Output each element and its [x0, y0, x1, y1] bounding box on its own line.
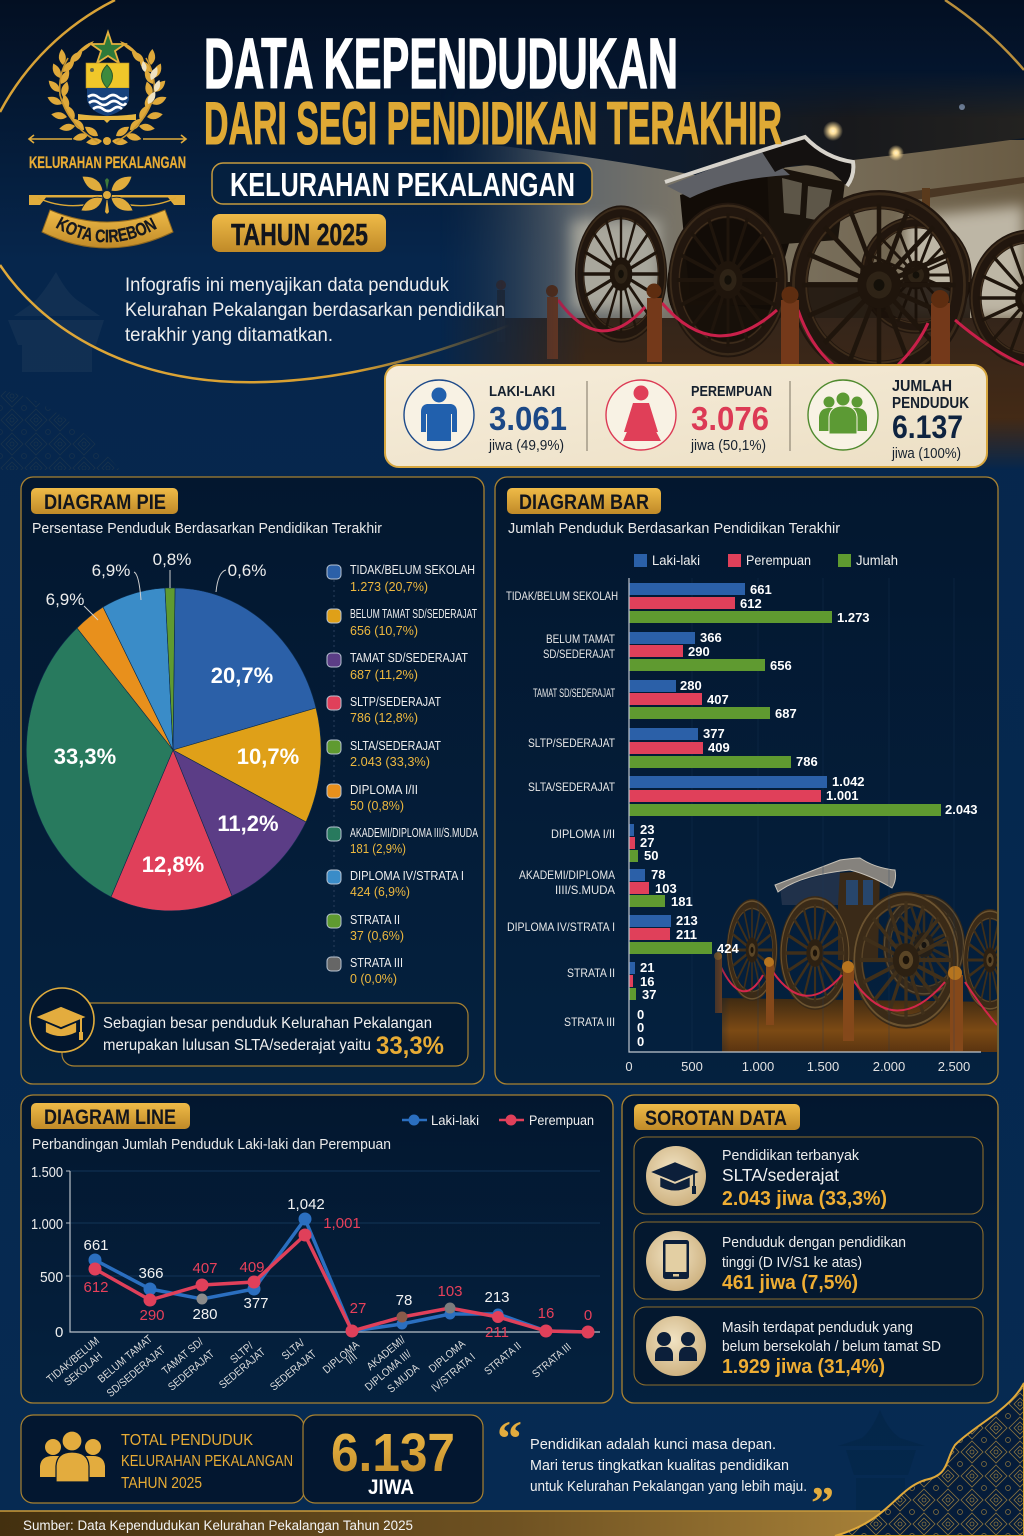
highlight: pendidikan tinggi: Penduduk dengan pendidikan — [722, 1235, 906, 1251]
bar categories: DIPLOMA IV/STRATA I — [507, 920, 615, 934]
bar axis: 2.500 — [938, 1059, 970, 1074]
bar values: 181 — [671, 894, 693, 909]
line: perempuan — [88, 1228, 594, 1338]
line axes: 1.000 — [31, 1216, 63, 1233]
bar categories — [506, 589, 618, 1029]
ribbon: kota cirebon: KOTA CIREBON — [56, 216, 157, 242]
panel: diagram line — [21, 1095, 613, 1403]
line: laki-laki — [88, 1212, 588, 1332]
stat: female — [606, 380, 772, 454]
pie legend: 2.043 (33,3%) — [350, 754, 430, 769]
total population label card: TOTAL PENDUDUK — [121, 1432, 253, 1449]
quote: untuk Kelurahan Pekalangan yang lebih maju. — [530, 1478, 807, 1495]
quote: Mari terus tingkatkan kualitas pendidikan — [530, 1457, 789, 1474]
stat: male: LAKI-LAKI — [489, 383, 555, 400]
line values: 407 — [192, 1260, 218, 1277]
quote — [497, 1410, 834, 1528]
highlight: belum tamat: Masih terdapat penduduk yang — [722, 1320, 913, 1336]
highlight: belum tamat: belum bersekolah / belum tamat SD — [722, 1339, 941, 1355]
total population number card — [303, 1415, 483, 1503]
pie legend: DIPLOMA I/II — [350, 782, 418, 797]
photo room — [440, 70, 1024, 470]
icon: people group — [40, 1431, 105, 1482]
line legend: Perempuan — [529, 1113, 594, 1128]
bar subtitle: Jumlah Penduduk Berdasarkan Pendidikan Terakhir — [508, 521, 840, 537]
bar axis: 500 — [681, 1059, 703, 1074]
line legend — [402, 1113, 594, 1128]
bar values: 377 — [703, 726, 725, 741]
heading: diagram line: DIAGRAM LINE — [44, 1106, 176, 1129]
pie values: 11,2% — [217, 811, 279, 836]
pie legend: SLTP/SEDERAJAT — [350, 694, 441, 709]
icon: tablet — [646, 1231, 706, 1291]
line legend: Laki-laki — [431, 1113, 479, 1128]
line values: 280 — [192, 1306, 218, 1323]
line axes: 0 — [55, 1324, 63, 1341]
bar values: 0 — [637, 1007, 644, 1022]
pie legend: 37 (0,6%) — [350, 928, 404, 943]
bar axis — [625, 578, 981, 1074]
quote: ” — [811, 1477, 834, 1528]
rope barrier — [496, 280, 1024, 368]
line values: 612 — [83, 1279, 109, 1296]
pie values: 6,9% — [92, 561, 130, 580]
bar categories: BELUM TAMAT — [546, 632, 616, 646]
pie legend: DIPLOMA IV/STRATA I — [350, 868, 464, 883]
bar values: 424 — [717, 941, 739, 956]
icon: star — [91, 32, 125, 63]
intro text: Kelurahan Pekalangan berdasarkan pendidikan — [125, 300, 505, 321]
pie legend: TIDAK/BELUM SEKOLAH — [350, 562, 475, 577]
icon: arrows — [29, 135, 186, 143]
bar legend: Perempuan — [746, 553, 811, 568]
intro text: Infografis ini menyajikan data penduduk — [125, 275, 449, 296]
callout: slta majority: merupakan lulusan SLTA/sederajat yaitu — [103, 1037, 371, 1054]
line categories — [45, 1333, 574, 1400]
highlight: pendidikan tinggi: tinggi (D IV/S1 ke atas) — [722, 1255, 862, 1271]
title — [204, 25, 782, 157]
highlight: belum tamat — [634, 1307, 983, 1385]
pie legend: 656 (10,7%) — [350, 623, 418, 638]
quote: Pendidikan adalah kunci masa depan. — [530, 1436, 776, 1453]
bar values: 0 — [637, 1020, 644, 1035]
bar values: 656 — [770, 658, 792, 673]
pie legend: 687 (11,2%) — [350, 667, 418, 682]
pie chart — [26, 588, 321, 911]
line categories: S.MUDA — [386, 1362, 422, 1396]
decorative temple silhouette — [838, 1410, 925, 1510]
line categories: SEDERAJAT — [166, 1348, 218, 1394]
line values: 103 — [437, 1283, 463, 1300]
line values: 27 — [350, 1300, 366, 1317]
bar axis: 0 — [625, 1059, 633, 1074]
line categories: DIPLOMA III/ — [363, 1348, 414, 1394]
line categories: SEDERAJAT — [268, 1348, 320, 1394]
icon: graduation cap — [30, 988, 94, 1052]
bar categories: STRATA II — [567, 966, 615, 980]
pie values — [46, 550, 299, 877]
bar categories: IIII/S.MUDA — [555, 883, 615, 897]
logo emblem — [28, 29, 188, 248]
stat: female: PEREMPUAN — [691, 383, 772, 400]
intro text — [125, 275, 505, 346]
line categories: DIPLOMA — [427, 1338, 468, 1375]
bar values: 290 — [688, 644, 710, 659]
bar values: 1.273 — [837, 610, 870, 625]
pie values: 12,8% — [142, 852, 204, 877]
bar values: 37 — [642, 987, 656, 1002]
bar categories: TIDAK/BELUM SEKOLAH — [506, 589, 618, 603]
bar values: 16 — [640, 974, 654, 989]
carriage — [577, 137, 1024, 376]
pie legend: 786 (12,8%) — [350, 710, 418, 725]
logo caption: KELURAHAN PEKALANGAN — [29, 153, 186, 172]
callout: slta majority — [30, 988, 468, 1066]
icon: shield — [78, 63, 136, 123]
panel: sorotan data — [622, 1095, 998, 1403]
pie legend: 181 (2,9%) — [350, 841, 406, 856]
line categories: IV/STRATA I — [430, 1351, 478, 1395]
bar values: 50 — [644, 848, 658, 863]
bar values: 409 — [708, 740, 730, 755]
title: DATA KEPENDUDUKAN — [204, 25, 678, 104]
panel: diagram pie — [21, 477, 484, 1084]
header arcs — [0, 0, 1024, 382]
total population number card: 6.137 — [331, 1423, 455, 1483]
line values: 16 — [538, 1305, 554, 1322]
line values: 366 — [138, 1265, 164, 1282]
heading: diagram pie: DIAGRAM PIE — [44, 491, 166, 514]
line values: 661 — [83, 1237, 109, 1254]
total population label card — [21, 1415, 304, 1503]
pie legend: BELUM TAMAT SD/SEDERAJAT — [350, 606, 477, 621]
bar values: 612 — [740, 596, 762, 611]
stat: male: 3.061 — [489, 400, 567, 437]
bar axis: 1.000 — [742, 1059, 774, 1074]
decorative corner batik — [835, 1383, 1024, 1536]
bar axis: 1.500 — [807, 1059, 839, 1074]
bar values: 21 — [640, 960, 654, 975]
bar values: 78 — [651, 867, 665, 882]
line categories: SD/SEDERAJAT — [105, 1344, 169, 1400]
highlight: pendidikan tinggi — [634, 1222, 983, 1299]
stat: total: jiwa (100%) — [891, 446, 961, 462]
bar categories: SLTP/SEDERAJAT — [528, 736, 616, 750]
pie values: 10,7% — [237, 744, 299, 769]
stat: total: JUMLAH — [892, 378, 952, 395]
decorative batik motif: left — [0, 272, 120, 470]
bar values: 23 — [640, 822, 654, 837]
stat: total — [808, 378, 969, 462]
icon: graduation cap — [646, 1146, 706, 1206]
footer bar: Sumber: Data Kependudukan Kelurahan Pekalangan Tahun 2025 — [23, 1518, 413, 1533]
bar values: 213 — [676, 913, 698, 928]
pie values: 0,6% — [228, 561, 266, 580]
pie values: 6,9% — [46, 590, 84, 609]
line categories: SEDERAJAT — [217, 1346, 269, 1392]
stat: male — [404, 380, 567, 454]
header photo: museum carriage — [440, 70, 1024, 470]
heading: diagram bar: DIAGRAM BAR — [519, 491, 649, 514]
icon: two people — [646, 1316, 706, 1376]
highlight: belum tamat: 1.929 jiwa (31,4%) — [722, 1356, 885, 1378]
line values: 1,001 — [323, 1215, 361, 1232]
stat: female: 3.076 — [691, 400, 769, 437]
total population number card: JIWA — [368, 1476, 414, 1499]
bar values: 366 — [700, 630, 722, 645]
bar values: 280 — [680, 678, 702, 693]
line values: 290 — [139, 1307, 165, 1324]
line categories: TIDAK/BELUM — [45, 1335, 102, 1386]
intro text: terakhir yang ditamatkan. — [125, 325, 333, 346]
pie legend: 50 (0,8%) — [350, 798, 404, 813]
bar legend: Laki-laki — [652, 553, 700, 568]
bar legend: Jumlah — [856, 553, 898, 568]
bar values: 786 — [796, 754, 818, 769]
pie values: 33,3% — [54, 744, 116, 769]
pie subtitle: Persentase Penduduk Berdasarkan Pendidikan Terakhir — [32, 521, 382, 537]
heading: sorotan data: SOROTAN DATA — [645, 1107, 787, 1130]
highlight: pendidikan tinggi: 461 jiwa (7,5%) — [722, 1272, 858, 1294]
line categories: SEKOLAH — [63, 1350, 105, 1389]
bar values: 1.001 — [826, 788, 859, 803]
bar values: 661 — [750, 582, 772, 597]
line values: 377 — [243, 1295, 269, 1312]
pill: kelurahan: KELURAHAN PEKALANGAN — [230, 166, 575, 203]
bar values: 407 — [707, 692, 729, 707]
line categories: STRATA II — [483, 1340, 524, 1378]
bar categories: AKADEMI/DIPLOMA — [519, 868, 615, 882]
line categories: STRATA III — [531, 1341, 574, 1381]
line categories: AKADEMI/ — [365, 1334, 408, 1373]
pie legend: 0 (0,0%) — [350, 971, 397, 986]
bar categories: SLTA/SEDERAJAT — [528, 780, 616, 794]
icon: floral divider — [29, 172, 185, 216]
line categories: I/II — [344, 1351, 360, 1367]
bar values: 103 — [655, 881, 677, 896]
pie values: 0,8% — [153, 550, 191, 569]
line categories: TAMAT SD/ — [160, 1336, 206, 1378]
bar values: 1.042 — [832, 774, 865, 789]
line axes — [31, 1164, 600, 1341]
bar categories: STRATA III — [564, 1015, 615, 1029]
pie legend: STRATA II — [350, 912, 400, 927]
pie values: 20,7% — [211, 663, 273, 688]
pie legend: STRATA III — [350, 955, 403, 970]
pie legend: 1.273 (20,7%) — [350, 579, 428, 594]
total population label card: TAHUN 2025 — [121, 1475, 202, 1492]
pill: tahun: TAHUN 2025 — [231, 217, 368, 252]
bar categories: TAMAT SD/SEDERAJAT — [533, 686, 615, 700]
highlight: slta: 2.043 jiwa (33,3%) — [722, 1188, 887, 1210]
quote: “ — [497, 1410, 522, 1466]
bar values: 0 — [637, 1034, 644, 1049]
panel: diagram bar — [495, 477, 1016, 1084]
pie legend: AKADEMI/DIPLOMA III/S.MUDA — [350, 825, 478, 840]
bar values — [637, 582, 978, 1049]
line values: 409 — [239, 1259, 265, 1276]
total population label card: KELURAHAN PEKALANGAN — [121, 1453, 293, 1470]
highlight: slta: Pendidikan terbanyak — [722, 1148, 860, 1164]
pie legend: TAMAT SD/SEDERAJAT — [350, 650, 468, 665]
line values: 213 — [484, 1289, 510, 1306]
pie legend — [327, 562, 478, 986]
bar legend — [634, 553, 898, 568]
panel: population summary card — [385, 365, 987, 467]
stat: male: jiwa (49,9%) — [488, 438, 564, 454]
line axes: 500 — [40, 1269, 63, 1286]
line categories: SLTP/ — [228, 1340, 256, 1366]
line subtitle: Perbandingan Jumlah Penduduk Laki-laki dan Perempuan — [32, 1137, 391, 1153]
carriage photo inset — [714, 858, 1016, 1052]
line axes: 1.500 — [31, 1164, 63, 1181]
line categories: DIPLOMA — [321, 1339, 362, 1376]
bar categories: DIPLOMA I/II — [551, 827, 615, 841]
bar values: 27 — [640, 835, 654, 850]
line categories: BELUM TAMAT — [96, 1333, 156, 1386]
bar values: 2.043 — [945, 802, 978, 817]
bar values: 211 — [676, 927, 697, 942]
highlight: slta: SLTA/sederajat — [722, 1165, 839, 1185]
bar categories: SD/SEDERAJAT — [543, 647, 616, 661]
stat: total: 6.137 — [892, 409, 963, 445]
callout: slta majority: 33,3% — [376, 1032, 444, 1060]
icon: laurel wreath — [46, 41, 168, 146]
line values: 0 — [584, 1307, 592, 1324]
pie legend: SLTA/SEDERAJAT — [350, 738, 441, 753]
line categories: SLTA/ — [280, 1337, 307, 1363]
stat: female: jiwa (50,1%) — [690, 438, 766, 454]
line values: 78 — [396, 1292, 412, 1309]
footer bar — [0, 1511, 1024, 1536]
callout: slta majority: Sebagian besar penduduk Kelurahan Pekalangan — [103, 1015, 432, 1032]
line values: 1,042 — [287, 1196, 325, 1213]
highlight: slta — [634, 1137, 983, 1214]
pie legend: 424 (6,9%) — [350, 884, 410, 899]
bar values: 687 — [775, 706, 797, 721]
bars — [629, 578, 954, 1052]
stat: total: PENDUDUK — [892, 395, 969, 412]
bar axis: 2.000 — [873, 1059, 905, 1074]
line values: 211 — [485, 1324, 509, 1341]
line values — [83, 1196, 592, 1341]
